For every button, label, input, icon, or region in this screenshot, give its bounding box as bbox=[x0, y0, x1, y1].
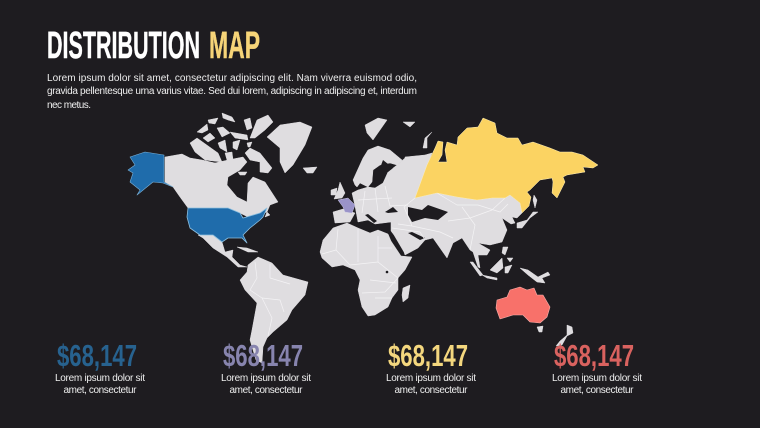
highlighted country: Australia bbox=[496, 287, 550, 323]
stat: blue: $68,147 bbox=[57, 338, 137, 373]
intro text block: nec metus. bbox=[47, 100, 91, 111]
stat: blue bbox=[55, 338, 145, 396]
stat: red: Lorem ipsum dolor sit bbox=[552, 373, 642, 384]
stat: yellow: amet, consectetur bbox=[394, 385, 468, 396]
stat: purple: amet, consectetur bbox=[230, 385, 303, 396]
world map bbox=[128, 113, 598, 363]
stat: blue: amet, consectetur bbox=[64, 385, 137, 396]
intro text block: Lorem ipsum dolor sit amet, consectetur adipiscing elit. Nam viverra euismod odio, bbox=[47, 73, 417, 84]
highlighted country: Alaska bbox=[128, 152, 173, 195]
title: MAP bbox=[209, 25, 260, 67]
highlighted country: Russia bbox=[415, 118, 598, 213]
stat: yellow bbox=[386, 338, 476, 396]
intro text block bbox=[47, 73, 417, 111]
stat: purple bbox=[221, 338, 311, 396]
stat: yellow: $68,147 bbox=[388, 338, 468, 373]
stat: yellow: Lorem ipsum dolor sit bbox=[386, 373, 476, 384]
stat: red: $68,147 bbox=[554, 338, 634, 373]
stat: red bbox=[552, 338, 642, 396]
stat: purple: Lorem ipsum dolor sit bbox=[221, 373, 311, 384]
inland seas bbox=[365, 160, 448, 273]
highlighted country: France bbox=[338, 198, 355, 213]
stat: red: amet, consectetur bbox=[560, 385, 634, 396]
highlighted country: United States bbox=[187, 208, 267, 243]
country borders bbox=[250, 186, 508, 336]
intro text block: gravida pellentesque urna varius vitae. Sed dui lorem, adipiscing in adipiscing et, interdum bbox=[47, 86, 417, 97]
landmasses in grey bbox=[165, 113, 573, 363]
stat: blue: Lorem ipsum dolor sit bbox=[55, 373, 145, 384]
stat: purple: $68,147 bbox=[223, 338, 303, 373]
title: DISTRIBUTION bbox=[47, 25, 200, 67]
